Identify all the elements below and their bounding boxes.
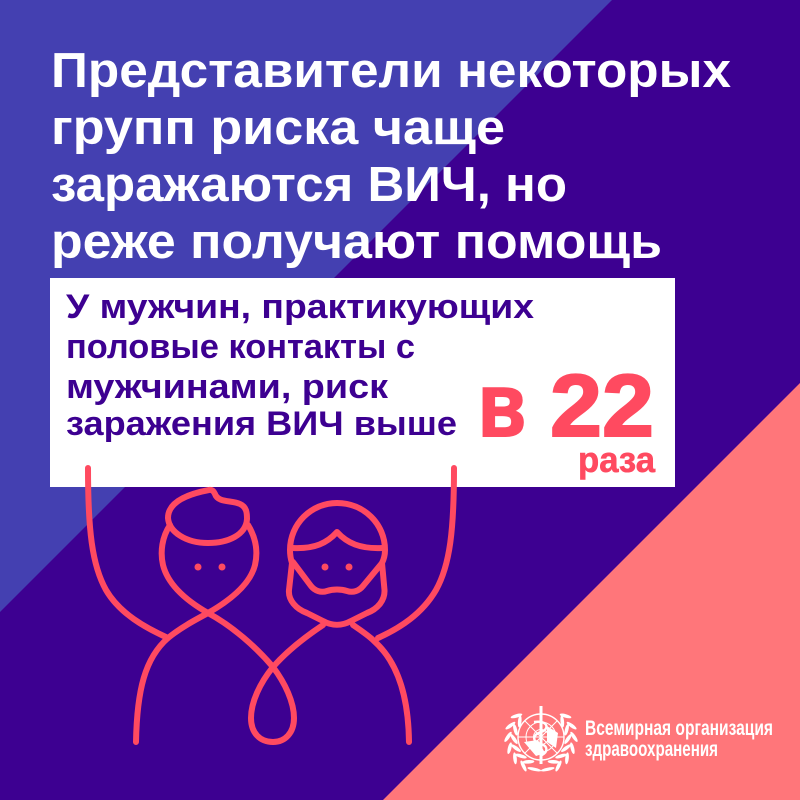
WHO logo [503,706,773,772]
title: реже получают помощь [51,215,662,269]
right person: eyes [322,564,328,570]
illustration: two people holding the sign [88,468,454,742]
right person: fringe [293,532,382,548]
WHO name [585,717,773,761]
statistic: в 22 раза: 22 [550,356,654,455]
right arm [378,468,454,638]
callout text [66,288,534,443]
WHO name: здравоохранения [585,738,718,761]
background: coral triangle [383,383,800,800]
panel background [50,278,675,487]
left arm [88,468,168,638]
callout text: мужчинами, риск [66,368,389,406]
callout text: У мужчин, практикующих [66,288,534,326]
title [51,44,731,269]
right person: head and beard outline [289,503,385,625]
right person: body [353,625,409,742]
left person: face and body outline [162,525,323,742]
title: Представители некоторых [51,44,731,98]
statistic: в 22 раза: в [478,356,526,456]
callout text: половые контакты с [66,328,415,366]
left person: eyes [194,564,202,570]
right laurel [540,713,579,772]
callout text: заражения ВИЧ выше [66,405,457,443]
right person: beard line [293,562,382,592]
left laurel [503,713,542,772]
title: заражаются ВИЧ, но [51,158,567,212]
statistic: в 22 раза [478,356,656,480]
background: blue triangle [0,0,612,612]
white callout panel [50,278,675,487]
statistic: в 22 раза: раза [578,439,656,480]
WHO emblem [503,706,579,772]
left person: hair [168,490,247,543]
title: групп риска чаще [51,101,505,155]
